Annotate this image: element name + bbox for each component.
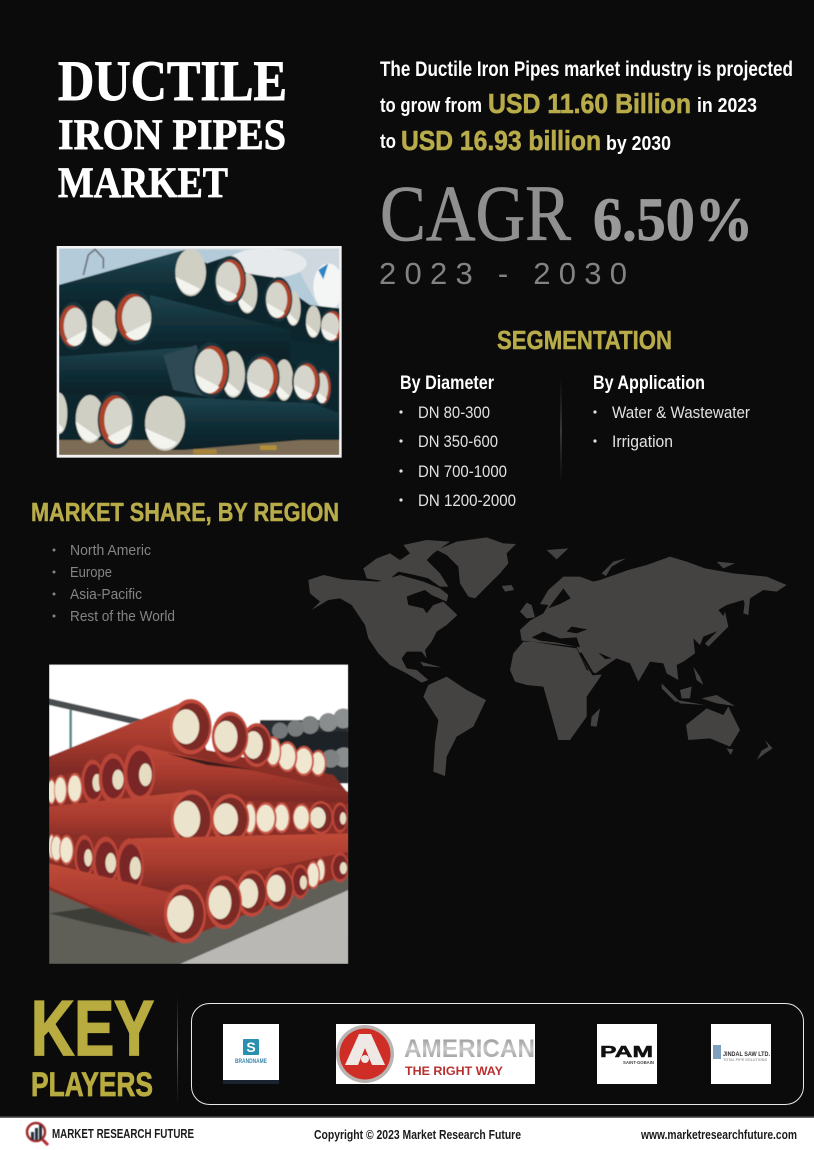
- CAGR figure: 6.50%: [593, 187, 753, 254]
- key players heading: PLAYERS: [31, 1066, 153, 1104]
- segmentation: by diameter: DN 700-1000: [418, 462, 507, 481]
- segmentation: by diameter: [399, 373, 516, 510]
- logo: PAM Saint-Gobain: [597, 1024, 657, 1084]
- footer bar: [0, 1116, 814, 1150]
- title: MARKET: [58, 160, 228, 207]
- logo: PAM Saint-Gobain: SAINT-GOBAIN: [623, 1060, 654, 1065]
- segmentation: by application: By Application: [593, 373, 705, 394]
- region list: [52, 542, 175, 625]
- logo: PAM Saint-Gobain: PAM: [600, 1044, 653, 1061]
- segmentation: by application: [593, 373, 750, 451]
- market forecast text: USD 16.93 billion: [401, 125, 601, 156]
- region list: Asia-Pacific: [70, 586, 142, 603]
- footer brand name: MARKET RESEARCH FUTURE: [52, 1126, 194, 1141]
- forecast period: 2023 - 2030: [379, 256, 627, 291]
- logo: Brandname: [223, 1024, 279, 1084]
- CAGR figure: CAGR: [380, 171, 571, 258]
- market forecast text: to: [380, 131, 396, 153]
- logo: Jindal Saw: TOTAL PIPE SOLUTIONS: [723, 1058, 768, 1062]
- logo: Jindal Saw: [711, 1024, 771, 1084]
- region list: Rest of the World: [70, 608, 175, 625]
- footer logo icon: [27, 1123, 48, 1145]
- logo: Brandname: BRANDNAME: [235, 1059, 267, 1065]
- segmentation: by application: Irrigation: [612, 432, 673, 451]
- segmentation: by diameter: DN 1200-2000: [418, 491, 516, 510]
- market forecast text: in 2023: [697, 95, 757, 117]
- pipe photo: black ductile iron pipes: [51, 246, 344, 458]
- title: DUCTILE: [58, 50, 287, 113]
- segmentation: by diameter: DN 350-600: [418, 432, 498, 451]
- CAGR figure: [380, 171, 753, 258]
- logo: Jindal Saw: JINDAL SAW LTD.: [723, 1051, 770, 1058]
- segmentation: by application: Water & Wastewater: [612, 403, 750, 422]
- market forecast text: [380, 58, 793, 156]
- key players heading: [31, 984, 154, 1104]
- logo: American: [336, 1024, 535, 1084]
- copyright: Copyright © 2023 Market Research Future: [314, 1127, 521, 1142]
- market share heading: MARKET SHARE, BY REGION: [31, 497, 339, 527]
- region list: North Americ: [70, 542, 151, 559]
- market forecast text: USD 11.60 Billion: [488, 88, 691, 119]
- market forecast text: to grow from: [380, 95, 482, 117]
- logo: American: AMERICAN: [404, 1035, 535, 1063]
- logo: American: THE RIGHT WAY: [405, 1066, 503, 1078]
- region list: Europe: [70, 564, 112, 581]
- segmentation: by diameter: DN 80-300: [418, 403, 490, 422]
- logo: Brandname: S: [246, 1039, 256, 1055]
- segmentation: by diameter: By Diameter: [400, 373, 495, 394]
- key players logo panel: [192, 1004, 804, 1104]
- pipe photo: red ductile iron pipes: [47, 664, 354, 964]
- title: IRON PIPES: [58, 112, 286, 159]
- key players heading: KEY: [31, 984, 154, 1072]
- title: [58, 50, 287, 207]
- world map: [308, 537, 787, 776]
- market forecast text: by 2030: [606, 133, 671, 155]
- segmentation heading: SEGMENTATION: [497, 325, 672, 355]
